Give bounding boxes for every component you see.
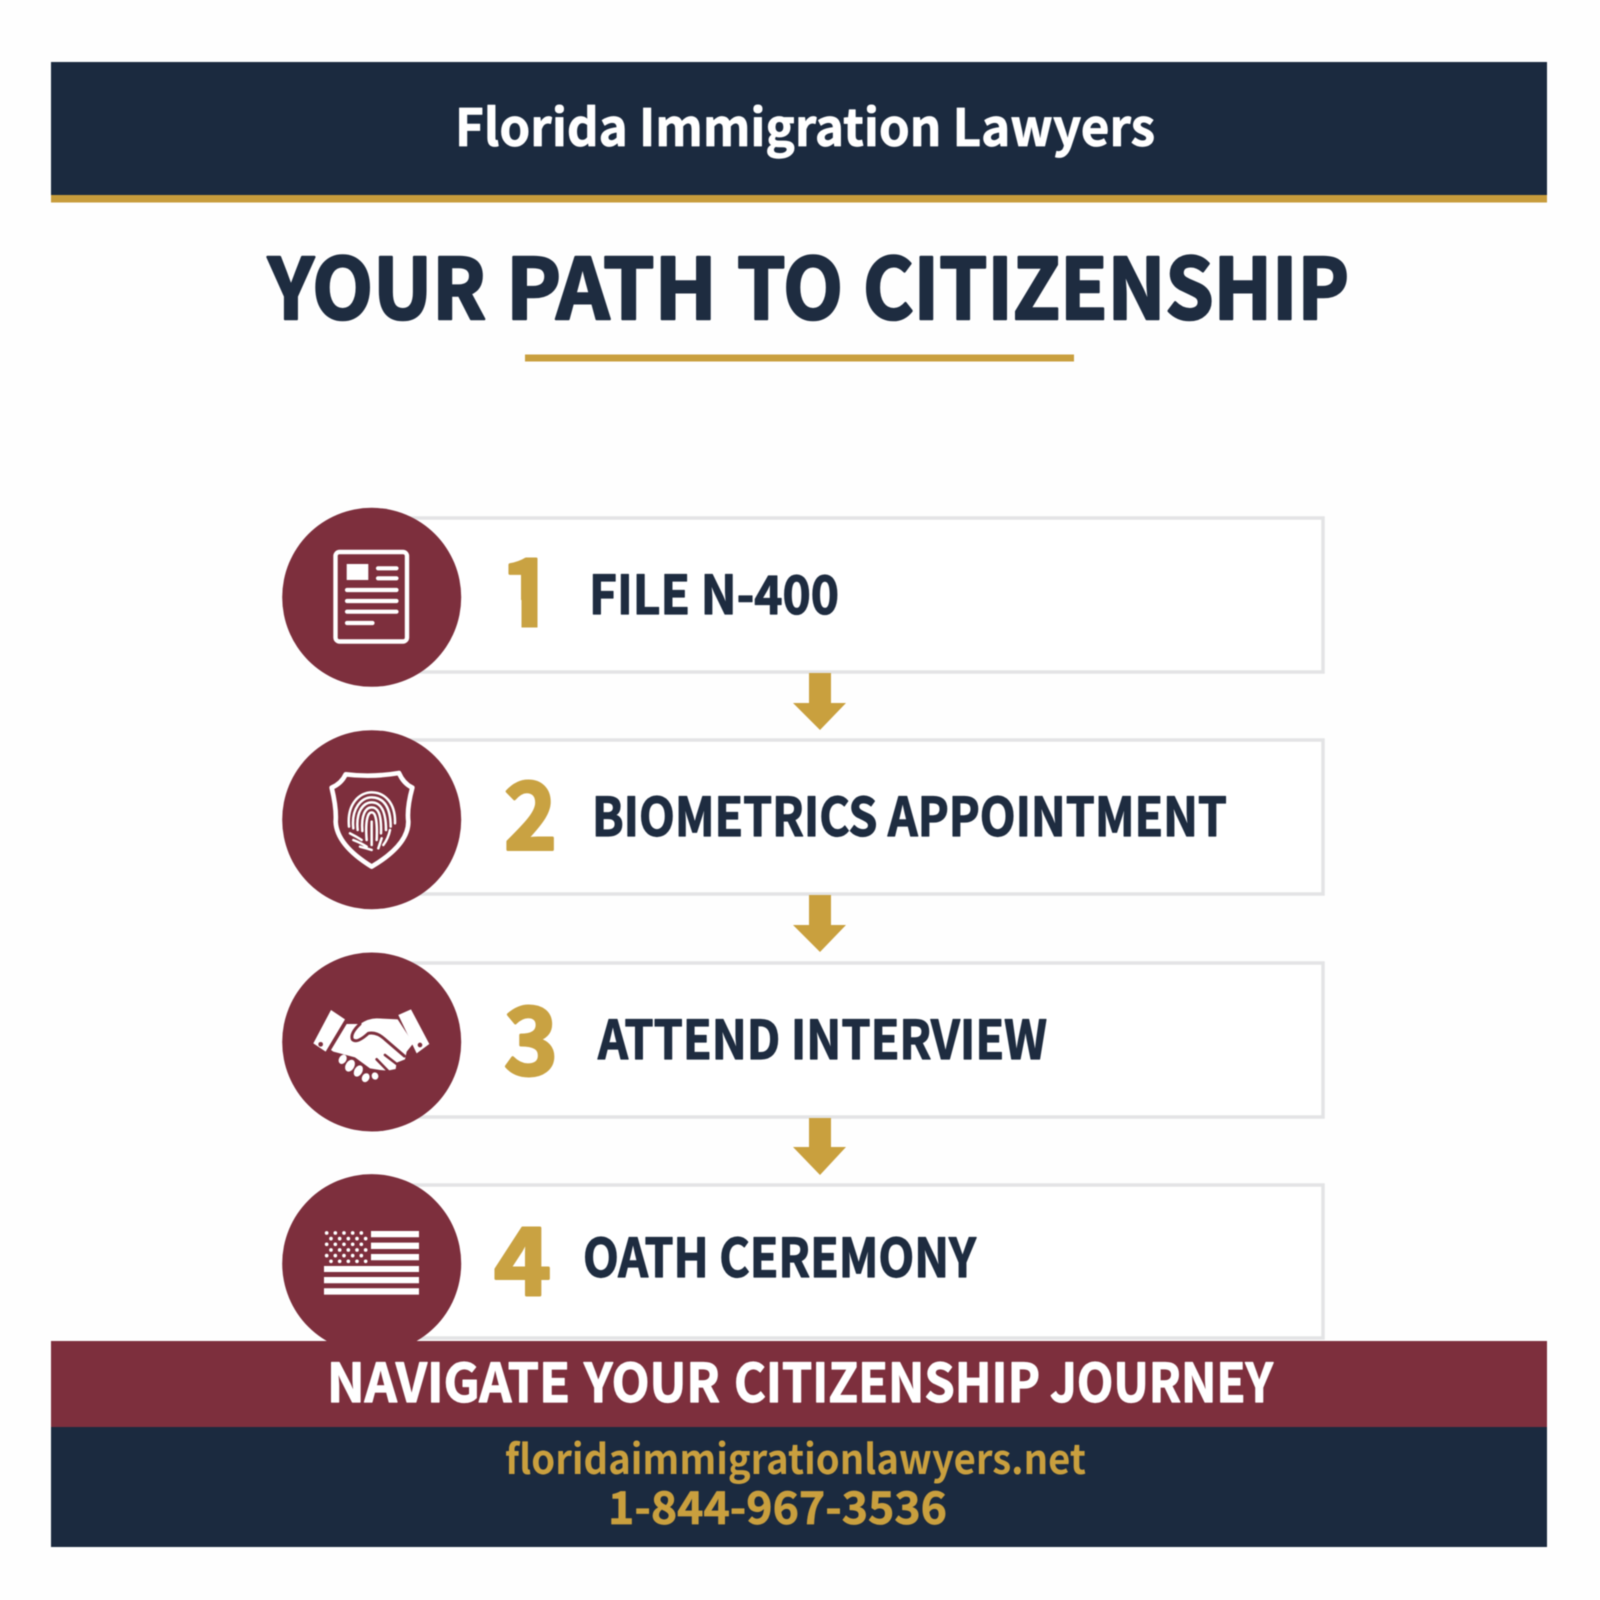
step 3 label: ATTEND INTERVIEW [597, 999, 1047, 1075]
icon: handshake on maroon circle [282, 952, 461, 1132]
step 3 number: 3 [504, 966, 558, 1102]
icon: fingerprint shield on maroon circle [282, 730, 461, 909]
tagline text: CITIZENSHIP [734, 1342, 1040, 1418]
arrow 1 [793, 673, 846, 730]
icon: document on maroon circle [282, 508, 461, 687]
website: floridaimmigrationlawyers.net [505, 1426, 1086, 1486]
title: TO [737, 223, 843, 344]
panel: step 3 card [372, 963, 1323, 1117]
step 4 label: OATH CEREMONY [583, 1217, 977, 1293]
tagline text: NAVIGATE [327, 1342, 570, 1418]
arrow 3 [793, 1118, 846, 1175]
phone number: 1-844-967-3536 [608, 1472, 947, 1537]
panel: step 4 card [372, 1185, 1323, 1338]
icon: American flag on maroon circle [282, 1174, 461, 1353]
panel: step 1 card [372, 518, 1323, 672]
step 2 label: BIOMETRICS APPOINTMENT [592, 776, 1227, 852]
step 4 number: 4 [494, 1187, 551, 1322]
tagline text: JOURNEY [1050, 1342, 1274, 1418]
header firm name: Florida Immigration Lawyers [455, 87, 1155, 161]
step 2 number: 2 [504, 742, 557, 876]
title: CITIZENSHIP [863, 223, 1349, 344]
step 1 number: 1 [500, 518, 555, 653]
arrow 2 [793, 895, 846, 952]
title: PATH [506, 223, 717, 344]
tagline band [51, 1341, 1547, 1427]
header band [51, 62, 1547, 202]
title: YOUR [267, 223, 486, 344]
panel: step 2 card [372, 740, 1323, 894]
step 1 label: FILE N-400 [589, 554, 839, 630]
contact footer [51, 1426, 1547, 1547]
title underline [525, 354, 1074, 362]
tagline text: YOUR [583, 1342, 720, 1418]
